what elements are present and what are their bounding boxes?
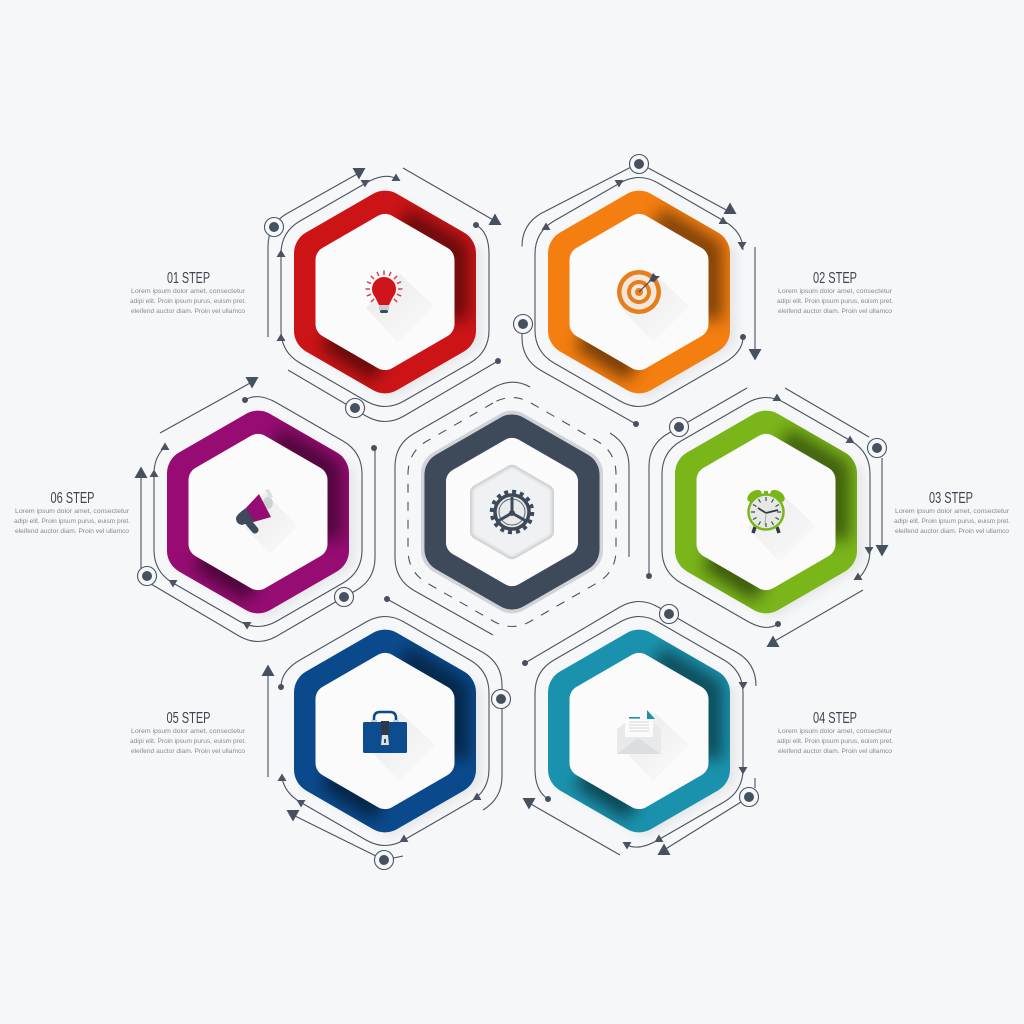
text block: step 02 description: [777, 289, 893, 315]
text block: step 01 description: [130, 289, 246, 315]
panel: step 06: [14, 377, 377, 642]
text block: step 04 description: [777, 729, 893, 755]
text block: step 03 description: adipi elit. Proin ipsum purus, euism pret.: [894, 519, 1010, 525]
dashed and solid circuit lines: hub: [395, 382, 629, 635]
connector lines with arrows: step 01: [264, 168, 502, 422]
text block: step 06 description: Lorem ipsum dolor amet, consectetur: [15, 509, 129, 515]
text block: step 06 description: adipi elit. Proin ipsum purus, euism pret.: [14, 519, 130, 525]
icon: alarm clock: [745, 487, 816, 562]
connector lines with arrows: step 06: [134, 377, 377, 642]
text block: step 01 description: Lorem ipsum dolor amet, consectetur: [131, 289, 245, 295]
text block: step 05 description: Lorem ipsum dolor amet, consectetur: [131, 729, 245, 735]
panel: step 01: [130, 168, 502, 422]
text block: step 02 description: adipi elit. Proin ipsum purus, euism pret.: [777, 299, 893, 305]
text block: step 04 description: Lorem ipsum dolor amet, consectetur: [778, 729, 892, 735]
heading: 03 step: 03 STEP: [929, 490, 973, 507]
panel: step 05: [130, 596, 510, 870]
connector lines with arrows: step 02: [514, 154, 762, 427]
text block: step 06 description: [14, 509, 130, 535]
panel: step 04: [522, 602, 893, 855]
text block: step 04 description: adipi elit. Proin ipsum purus, euism pret.: [777, 739, 893, 745]
heading: 02 step: 02 STEP: [813, 270, 857, 287]
text block: step 04 description: eleifend auctor diam. Proin vel ullamco: [778, 749, 893, 755]
connector lines with arrows: step 04: [522, 602, 758, 855]
text block: step 05 description: adipi elit. Proin ipsum purus, euism pret.: [130, 739, 246, 745]
hexagon: magenta: [167, 411, 354, 618]
text block: step 01 description: adipi elit. Proin ipsum purus, euism pret.: [130, 299, 246, 305]
icon: light bulb: [366, 270, 434, 342]
text block: step 02 description: Lorem ipsum dolor amet, consectetur: [778, 289, 892, 295]
panel: step 03: [646, 388, 1010, 647]
hexagon: slate: [421, 411, 603, 613]
hexagon: red: [294, 191, 481, 398]
connector lines with arrows: step 05: [262, 596, 510, 870]
text block: step 05 description: eleifend auctor diam. Proin vel ullamco: [131, 749, 246, 755]
text block: step 06 description: eleifend auctor diam. Proin vel ullamco: [15, 529, 130, 535]
icon: gear: [492, 492, 532, 532]
panel: step 02: [514, 154, 893, 427]
icon: megaphone: [236, 489, 298, 554]
heading: 05 step: 05 STEP: [166, 710, 210, 727]
text block: step 03 description: eleifend auctor diam. Proin vel ullamco: [895, 529, 1010, 535]
icon: briefcase: [363, 712, 435, 781]
text block: step 03 description: [894, 509, 1010, 535]
hexagon: orange: [548, 191, 735, 398]
hexagon: blue: [294, 630, 481, 837]
panel: central hub: [395, 382, 629, 635]
hexagon: green: [675, 411, 862, 618]
icon: envelope with letter: [617, 710, 689, 781]
text block: step 03 description: Lorem ipsum dolor amet, consectetur: [895, 509, 1009, 515]
heading: 01 step: 01 STEP: [167, 270, 210, 287]
text block: step 02 description: eleifend auctor diam. Proin vel ullamco: [778, 309, 893, 315]
hexagon: teal: [548, 630, 735, 837]
icon: target with arrow: [617, 270, 689, 342]
connector lines with arrows: step 03: [646, 388, 888, 647]
heading: 06 step: 06 STEP: [50, 490, 94, 507]
text block: step 05 description: [130, 729, 246, 755]
heading: 04 step: 04 STEP: [813, 710, 857, 727]
text block: step 01 description: eleifend auctor diam. Proin vel ullamco: [131, 309, 246, 315]
